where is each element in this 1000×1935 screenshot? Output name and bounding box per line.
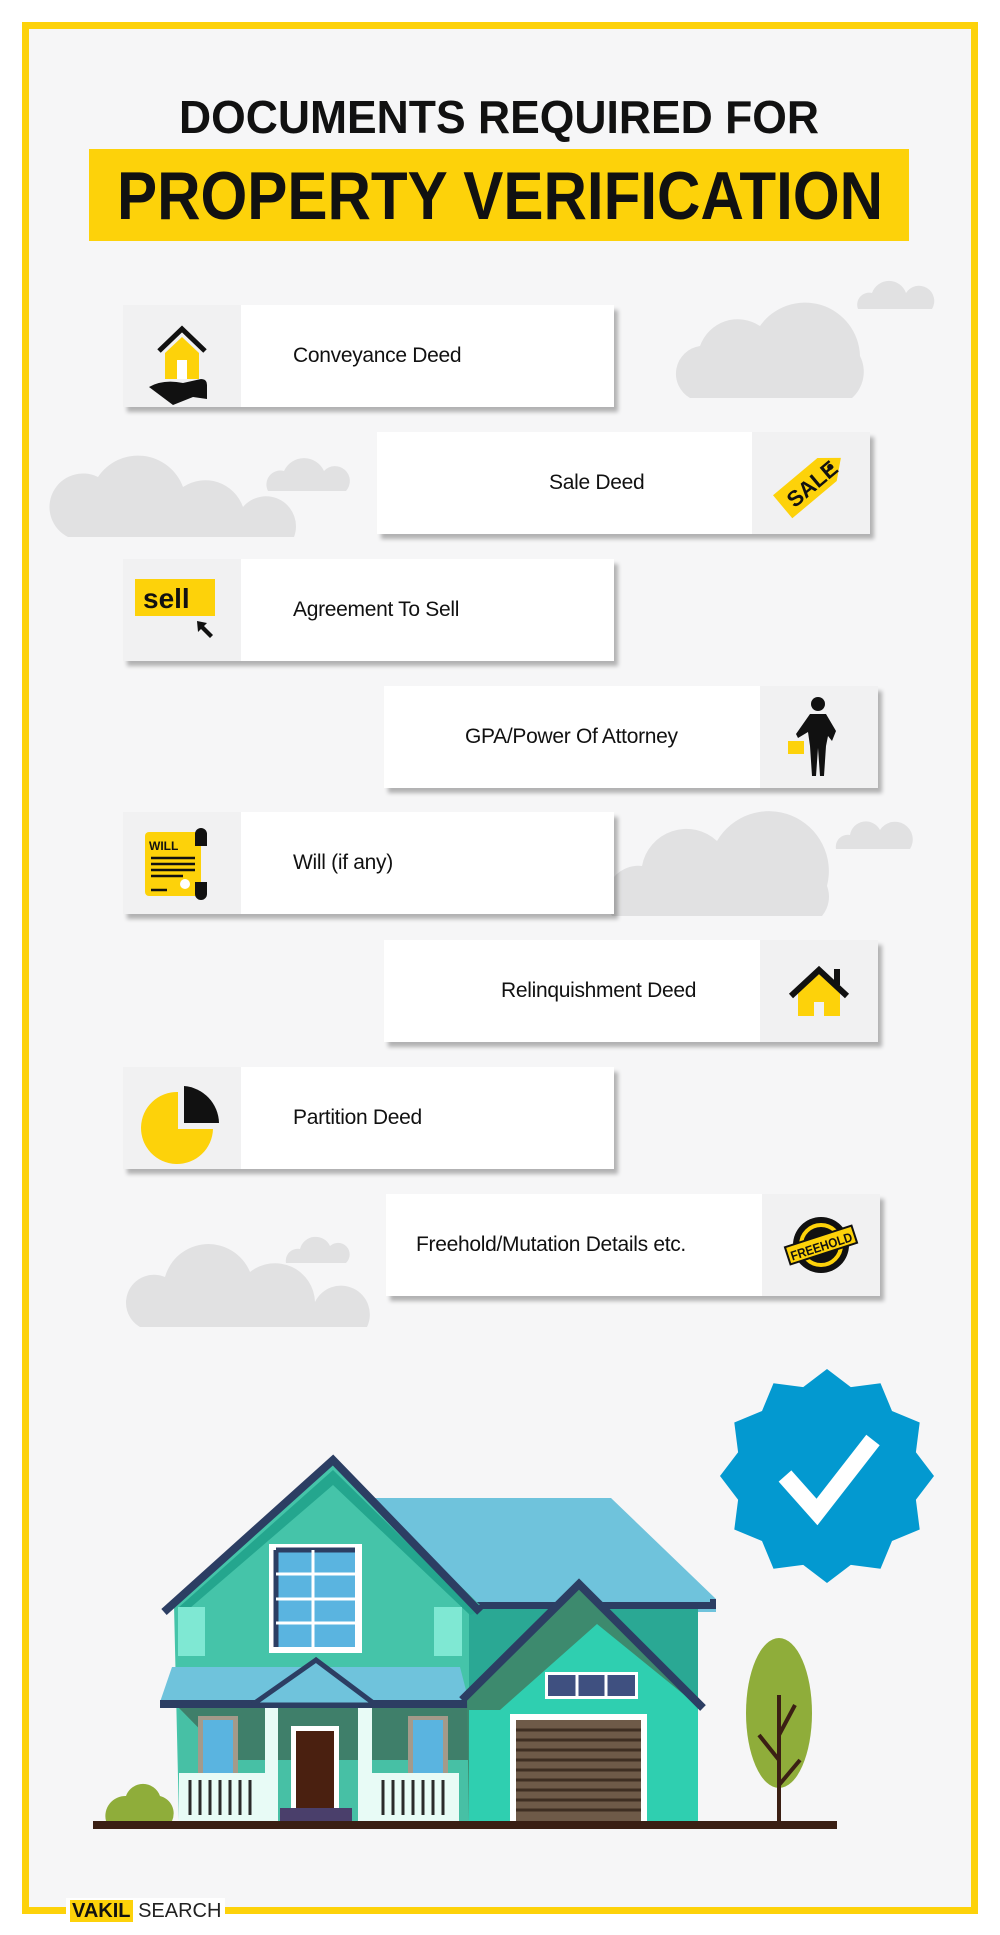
icon: sell button — [123, 559, 241, 661]
logo: Vakil Search: VAKIL SEARCH — [72, 1900, 221, 1922]
icon: sell button: sell — [143, 583, 190, 614]
card: Freehold/Mutation Details — [386, 1194, 880, 1296]
bush — [105, 1784, 174, 1821]
title highlight box: PROPERTY VERIFICATION — [117, 158, 883, 234]
card: Partition Deed — [123, 1067, 614, 1169]
title line 1: DOCUMENTS REQUIRED FOR — [179, 91, 819, 143]
card: Sale Deed: Sale Deed — [549, 471, 644, 494]
house — [160, 1460, 716, 1821]
badge — [720, 1369, 934, 1583]
icon: sale tag — [752, 432, 870, 534]
card: Partition Deed: Partition Deed — [293, 1106, 422, 1129]
card: Freehold/Mutation Details: Freehold/Mutation Details etc. — [416, 1233, 686, 1256]
card: Will — [123, 812, 614, 914]
icon: freehold stamp: FREEHOLD — [789, 1229, 854, 1263]
icon: will scroll — [123, 812, 241, 914]
title — [89, 91, 909, 241]
card: GPA/Power Of Attorney — [384, 686, 878, 788]
icon: house — [760, 940, 878, 1042]
card: Sale Deed — [377, 432, 870, 534]
icon: pie chart — [123, 1067, 241, 1169]
card: Conveyance Deed — [123, 305, 614, 407]
icon: sale tag: SALE — [782, 455, 843, 512]
icon: businessman — [760, 686, 878, 788]
card: Relinquishment Deed — [384, 940, 878, 1042]
ground — [93, 1821, 837, 1829]
icon: house in hand — [123, 305, 241, 407]
card: Conveyance Deed: Conveyance Deed — [293, 344, 461, 367]
icon: will scroll: WILL — [149, 839, 178, 853]
icon: freehold stamp — [762, 1194, 880, 1296]
card: GPA/Power Of Attorney: GPA/Power Of Attorney — [465, 725, 678, 748]
card: Agreement To Sell: Agreement To Sell — [293, 598, 459, 621]
card: Agreement To Sell — [123, 559, 614, 661]
card: Relinquishment Deed: Relinquishment Deed — [501, 979, 696, 1002]
tree — [746, 1638, 812, 1823]
card: Will: Will (if any) — [293, 851, 393, 874]
